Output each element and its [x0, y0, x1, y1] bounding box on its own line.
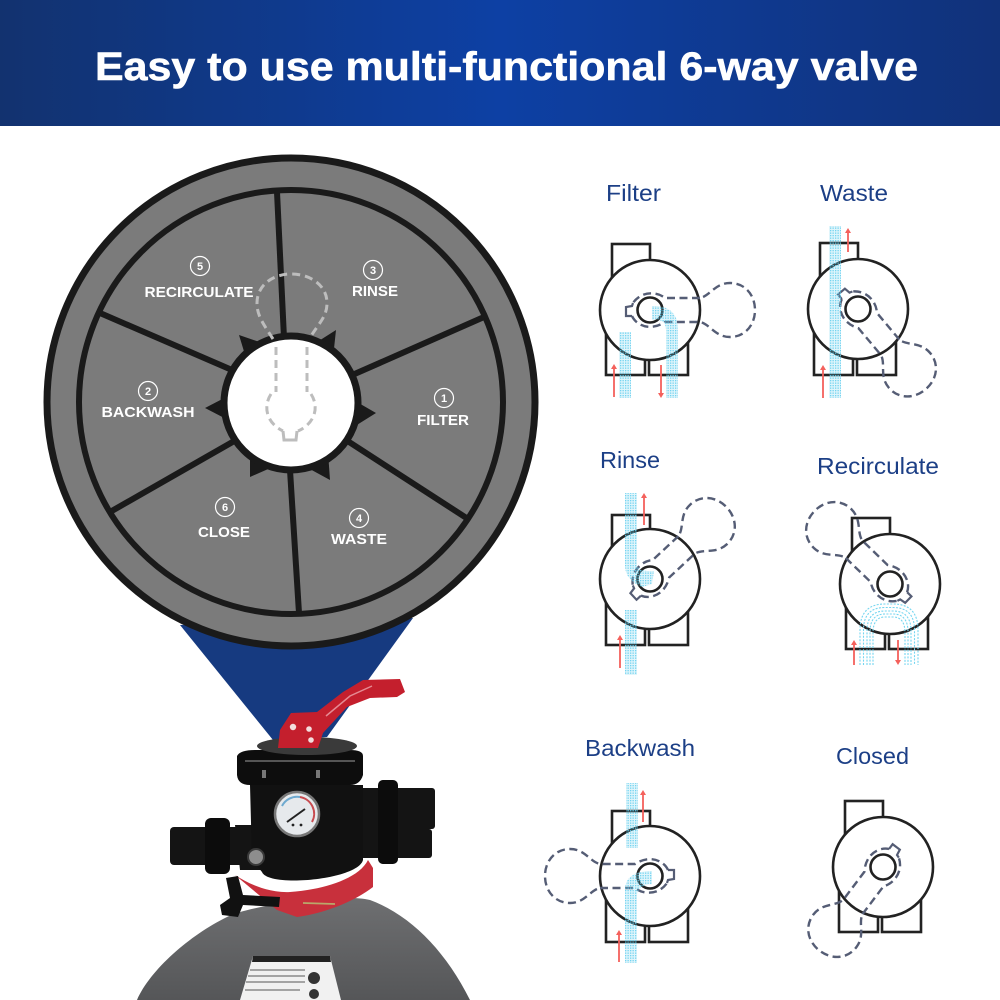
red clamp — [235, 860, 373, 917]
dial label: 4 waste — [331, 508, 387, 548]
dial label: 6 close: 6 — [222, 502, 228, 514]
dial label: 5 recirculate: 5 — [197, 261, 203, 273]
pressure gauge — [275, 792, 319, 836]
dial label: 3 rinse: RINSE — [352, 283, 398, 300]
label: Waste — [820, 180, 888, 206]
dial label: 2 backwash — [102, 382, 194, 421]
valve dial — [47, 158, 535, 646]
diagram: waste — [808, 180, 946, 407]
dial label: 5 recirculate: RECIRCULATE — [144, 284, 254, 301]
dial label: 1 filter: FILTER — [417, 412, 469, 429]
sight glass — [248, 849, 264, 865]
diagram: closed — [798, 743, 933, 967]
tank dome — [137, 898, 470, 1000]
red handle — [278, 679, 405, 748]
dial label: 2 backwash: BACKWASH — [102, 404, 194, 421]
arrows — [616, 790, 646, 962]
dial label: 6 close: CLOSE — [198, 524, 250, 541]
label: Closed — [836, 743, 909, 769]
arrows — [820, 228, 851, 398]
valve head — [237, 737, 363, 785]
diagram: backwash — [545, 735, 700, 963]
dial label: 4 waste: WASTE — [331, 531, 387, 548]
recirculation flow arch — [860, 604, 918, 665]
blue zoom cone — [180, 618, 413, 740]
dial label: 3 rinse: 3 — [370, 265, 376, 277]
label: Rinse — [600, 447, 660, 473]
sand filter tank with valve — [137, 679, 470, 1000]
dial label: 2 backwash: 2 — [145, 386, 151, 398]
dial label: 3 rinse — [352, 260, 398, 300]
dial label: 4 waste: 4 — [356, 513, 363, 525]
hub dashed valve outline — [257, 274, 327, 440]
label: Filter — [606, 180, 661, 206]
label: Backwash — [585, 735, 695, 761]
dial label: 5 recirculate — [144, 256, 254, 301]
diagram: rinse — [600, 447, 745, 675]
arrows — [851, 640, 901, 665]
diagram: recirculate — [796, 453, 940, 665]
valve body — [250, 785, 363, 881]
clamp bolt — [303, 903, 335, 904]
dial label: 1 filter — [417, 388, 469, 429]
diagram: filter — [600, 180, 755, 398]
header banner — [0, 0, 1000, 126]
dial hub — [224, 336, 358, 470]
arrows — [617, 493, 647, 668]
right pipes — [347, 780, 435, 864]
dial label: 1 filter: 1 — [441, 393, 447, 405]
title: Easy to use multi-functional 6-way valve — [95, 45, 918, 89]
left pipe — [170, 818, 262, 874]
tank label — [240, 956, 341, 1000]
clamp knob — [220, 876, 280, 917]
dial teeth — [205, 330, 376, 480]
label: Recirculate — [817, 453, 939, 479]
dial label: 6 close — [198, 498, 250, 541]
arrows — [611, 364, 664, 398]
